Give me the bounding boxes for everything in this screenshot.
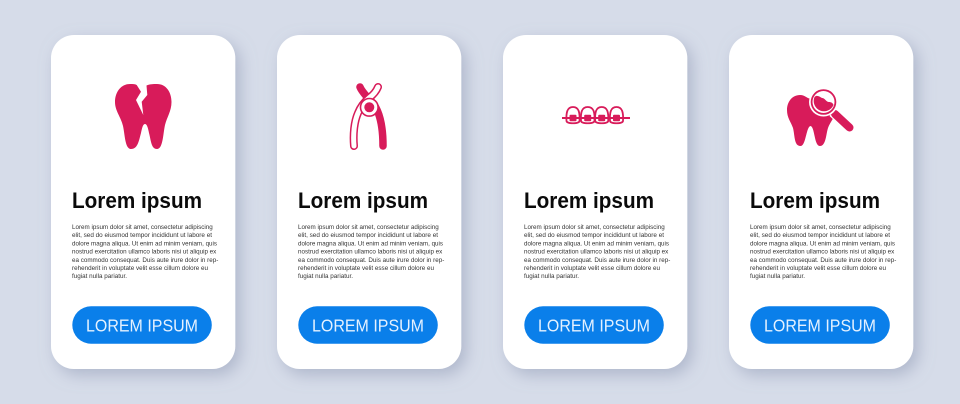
panel: card 3 braces: [503, 35, 687, 369]
text block: elit, sed do eiusmod tempor incididunt ut labore et: [750, 232, 890, 239]
text block: dolore magna aliqua. Ut enim ad minim veniam, quis: [298, 240, 444, 247]
icon: tooth with magnifier: [787, 88, 850, 146]
text block: [750, 224, 896, 280]
button: LOREM IPSUM: [538, 316, 650, 336]
text block: elit, sed do eiusmod tempor incididunt ut labore et: [72, 232, 212, 239]
icon: dental braces: [562, 107, 630, 123]
button: [298, 306, 438, 344]
text block: fugiat nulla pariatur.: [298, 273, 353, 280]
text block: [298, 224, 444, 280]
text block: ea commodo consequat. Duis aute irure dolor in rep-: [524, 257, 670, 264]
button: LOREM IPSUM: [86, 316, 198, 336]
text block: nostrud exercitation ullamco laboris nisi ut aliquip ex: [750, 249, 895, 256]
text block: dolore magna aliqua. Ut enim ad minim veniam, quis: [750, 240, 896, 247]
panel: card 2 dental pliers: [277, 35, 461, 369]
text block: ea commodo consequat. Duis aute irure dolor in rep-: [750, 257, 896, 264]
button: LOREM IPSUM: [312, 316, 424, 336]
icon: dental pliers: [354, 87, 383, 146]
text block: fugiat nulla pariatur.: [750, 273, 805, 280]
icon: broken tooth: [115, 84, 172, 149]
text block: nostrud exercitation ullamco laboris nisi ut aliquip ex: [72, 249, 217, 256]
text block: rehenderit in voluptate velit esse cillum dolore eu: [298, 265, 434, 272]
button: LOREM IPSUM: [764, 316, 876, 336]
text block: elit, sed do eiusmod tempor incididunt ut labore et: [298, 232, 438, 239]
text block: fugiat nulla pariatur.: [72, 273, 127, 280]
text block: ea commodo consequat. Duis aute irure dolor in rep-: [298, 257, 444, 264]
text block: rehenderit in voluptate velit esse cillum dolore eu: [72, 265, 208, 272]
text block: [524, 224, 670, 280]
heading: Lorem ipsum: [524, 188, 654, 213]
text block: ea commodo consequat. Duis aute irure dolor in rep-: [72, 257, 218, 264]
text block: dolore magna aliqua. Ut enim ad minim veniam, quis: [524, 240, 670, 247]
button: [524, 306, 664, 344]
text block: [72, 224, 218, 280]
text block: elit, sed do eiusmod tempor incididunt ut labore et: [524, 232, 664, 239]
button: [72, 306, 212, 344]
text block: Lorem ipsum dolor sit amet, consectetur adipiscing: [72, 224, 213, 231]
text block: rehenderit in voluptate velit esse cillum dolore eu: [750, 265, 886, 272]
text block: Lorem ipsum dolor sit amet, consectetur adipiscing: [524, 224, 665, 231]
heading: Lorem ipsum: [750, 188, 880, 213]
panel: card 4 tooth inspection: [729, 35, 913, 369]
text block: Lorem ipsum dolor sit amet, consectetur adipiscing: [298, 224, 439, 231]
text block: fugiat nulla pariatur.: [524, 273, 579, 280]
text block: nostrud exercitation ullamco laboris nisi ut aliquip ex: [524, 249, 669, 256]
text block: Lorem ipsum dolor sit amet, consectetur adipiscing: [750, 224, 891, 231]
text block: rehenderit in voluptate velit esse cillum dolore eu: [524, 265, 660, 272]
text block: nostrud exercitation ullamco laboris nisi ut aliquip ex: [298, 249, 443, 256]
heading: Lorem ipsum: [298, 188, 428, 213]
button: [750, 306, 890, 344]
panel: card 1 broken tooth: [51, 35, 235, 369]
heading: Lorem ipsum: [72, 188, 202, 213]
text block: dolore magna aliqua. Ut enim ad minim veniam, quis: [72, 240, 218, 247]
